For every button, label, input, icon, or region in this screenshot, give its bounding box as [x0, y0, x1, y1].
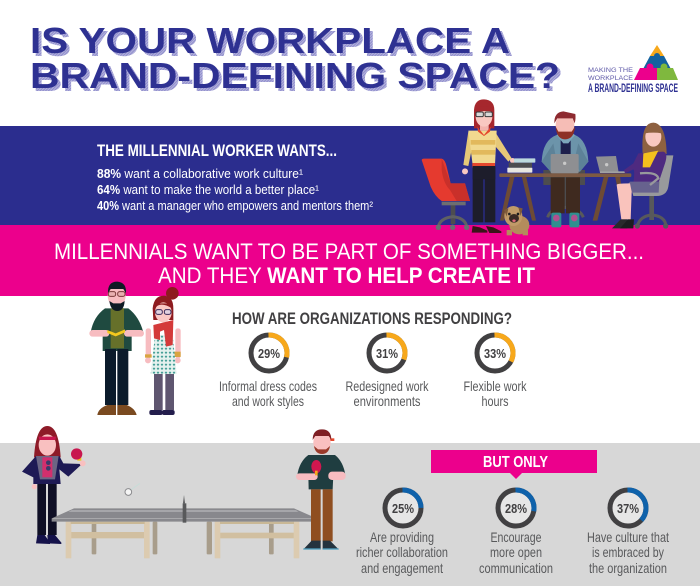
stat: 29 percent: and work styles — [232, 393, 304, 409]
stat: 28 percent: 28% — [505, 501, 527, 516]
stat: 29 percent — [219, 335, 317, 409]
man at laptop — [542, 111, 588, 227]
logo text: MAKING THE — [588, 67, 634, 74]
man with paddle — [296, 429, 346, 550]
callout: millennials headline — [54, 239, 644, 288]
title: IS YOUR WORKPLACE A — [33, 23, 513, 64]
ball — [125, 483, 140, 495]
callout: millennials headline: AND THEY WANT TO HELP CREATE IT — [158, 263, 536, 288]
callout: but only — [431, 450, 597, 479]
logo — [588, 45, 678, 95]
panel: millennial worker text: 64% want to make the world a better place¹ — [97, 182, 320, 197]
stat: 37 percent: Have culture that — [587, 529, 669, 545]
illustration: office team — [422, 99, 673, 235]
stat: 31 percent — [346, 335, 429, 409]
stat: 25 percent: and engagement — [361, 560, 443, 576]
stat: 28 percent — [479, 490, 553, 576]
stat: 33 percent: Flexible work — [464, 378, 527, 394]
panel: pink band — [0, 225, 700, 296]
woman with scarf — [145, 287, 181, 415]
illustration: man and woman with book — [89, 282, 181, 415]
stat: 37 percent: the organization — [589, 560, 667, 576]
title: BRAND-DEFINING SPACE? — [33, 58, 563, 99]
panel: millennial worker text — [97, 142, 374, 213]
callout: millennials headline: MILLENNIALS WANT TO BE PART OF SOMETHING BIGGER... — [54, 239, 644, 264]
stat: 28 percent: more open — [490, 544, 542, 560]
stat: 29 percent: 29% — [258, 346, 280, 361]
title — [30, 20, 563, 99]
stat: 31 percent: 31% — [376, 346, 398, 361]
panel: millennial worker text: THE MILLENNIAL WORKER WANTS... — [97, 142, 337, 160]
stat: 28 percent: Encourage — [490, 529, 542, 545]
callout: but only: BUT ONLY — [483, 454, 548, 471]
stat: 31 percent: Redesigned work — [346, 378, 429, 394]
red chair — [422, 159, 470, 230]
logo text — [588, 67, 678, 95]
ping pong table — [52, 495, 317, 558]
books — [507, 158, 535, 173]
stat: 25 percent: richer collaboration — [356, 544, 448, 560]
title: BRAND-DEFINING SPACE? — [30, 55, 560, 96]
stat: 25 percent: Are providing — [370, 529, 434, 545]
woman with paddle — [22, 426, 86, 544]
stat: 29 percent: Informal dress codes — [219, 378, 317, 394]
stat: 25 percent — [356, 490, 448, 576]
stat: 25 percent: 25% — [392, 501, 414, 516]
stat: 33 percent: 33% — [484, 346, 506, 361]
laptop — [596, 156, 625, 173]
illustration: table tennis — [22, 426, 346, 558]
stat: 31 percent: environments — [354, 393, 420, 409]
stat: 37 percent: is embraced by — [592, 544, 664, 560]
panel: millennial worker text: 88% want a collaborative work culture¹ — [97, 166, 304, 181]
man with book — [89, 282, 144, 415]
panel: millennial worker text: 40% want a manager who empowers and mentors them² — [97, 198, 374, 213]
stat: 37 percent — [587, 490, 669, 576]
desk — [499, 173, 631, 221]
stat: 33 percent — [464, 335, 527, 409]
title: IS YOUR WORKPLACE A — [30, 20, 510, 61]
heading: how are organizations responding: HOW ARE ORGANIZATIONS RESPONDING? — [232, 310, 512, 328]
stat: 28 percent: communication — [479, 560, 553, 576]
stat: 33 percent: hours — [482, 393, 508, 409]
icon: puzzle triangle — [634, 45, 678, 80]
stat: 37 percent: 37% — [617, 501, 639, 516]
panel: millennial worker band — [0, 126, 700, 225]
panel: gray band — [0, 443, 700, 586]
woman standing — [462, 99, 515, 233]
logo text: WORKPLACE — [588, 75, 634, 82]
woman seated — [612, 123, 673, 229]
pug — [504, 206, 529, 235]
